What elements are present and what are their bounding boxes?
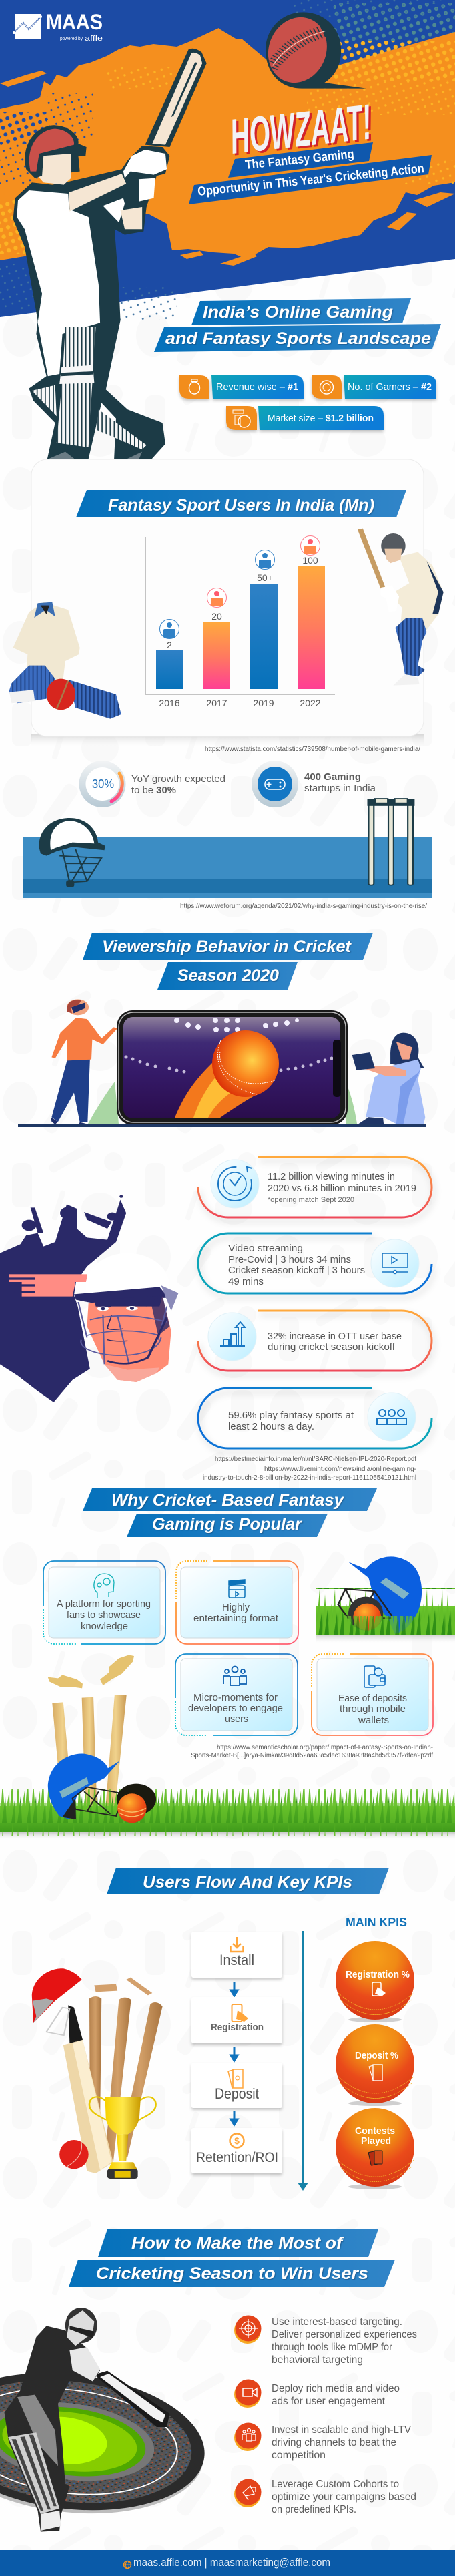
- tip: scalable channels: [234, 2422, 411, 2461]
- ball: [59, 2140, 89, 2169]
- bar chart: 50+: [257, 572, 273, 583]
- bar chart: 100: [302, 555, 318, 566]
- face: [38, 152, 71, 185]
- icon: globe: [124, 2561, 131, 2568]
- section heading: landscape: and Fantasy Sports Landscape: [165, 329, 431, 348]
- arrow: [231, 2111, 238, 2125]
- heading: Fantasy Sport Users In India (Mn): [108, 496, 374, 515]
- card: play fantasy sports: least 2 hours a day.: [228, 1422, 314, 1432]
- fire ball: [175, 1030, 279, 1118]
- stat: YoY growth: [79, 761, 225, 807]
- flow: registration: Registration: [211, 2022, 264, 2033]
- navy splash: [0, 1200, 126, 1402]
- title: Howzaat: [228, 93, 376, 166]
- salmon stripes: [9, 1274, 87, 1297]
- players heads: [22, 1195, 123, 1231]
- card: video streaming: Cricket season kickoff | 3 hours: [228, 1265, 365, 1276]
- face: [87, 1297, 171, 1382]
- illustration: grass with stumps, helmet and ball: [0, 1655, 455, 1840]
- kpi ball: contests: Played: [361, 2135, 391, 2147]
- badge: market size: Market size – $1.2 billion: [268, 413, 374, 424]
- illustration: batsman: [13, 49, 207, 476]
- halftone on blue: [0, 0, 455, 320]
- subtitle ribbons: The Fantasy Gaming: [244, 148, 355, 172]
- card: viewing minutes: 2020 vs 6.8 billion minutes in 2019: [268, 1183, 416, 1194]
- icon: phone wallet: [364, 1666, 385, 1687]
- tip: custom cohorts: Leverage Custom Cohorts to: [272, 2479, 399, 2490]
- flow: retention: Retention/ROI: [196, 2150, 278, 2165]
- illustration: splash portrait: [0, 1195, 179, 1402]
- illustration: stadium and batsman: [0, 2308, 220, 2532]
- source: semantic scholar: Sports-Market-B[...]arya-Nimkar/39d8d52aa63a5dec1638a93f8a4bd5d357f2dfea?p2df: [191, 1752, 433, 1759]
- flow: deposit: [191, 2063, 282, 2108]
- arms: [69, 174, 126, 212]
- illustration: bat, stumps and trophy: [32, 1968, 163, 2179]
- flow: retention: $: [234, 2135, 240, 2146]
- tip: interest-based targeting: [234, 2316, 417, 2366]
- kpi ball: contests: Contests: [355, 2125, 395, 2137]
- badge: revenue: Revenue wise – #1: [216, 381, 298, 393]
- card: OTT user base: [198, 1311, 432, 1371]
- feature card: entertaining: entertaining format: [193, 1613, 278, 1624]
- card: viewing minutes: [198, 1157, 432, 1217]
- bar chart: [145, 535, 335, 708]
- flow: install: [191, 1932, 282, 1978]
- bails and stumps: [48, 1655, 134, 1814]
- section heading: viewership: Viewership Behavior in Cricket: [102, 937, 352, 956]
- bat: [145, 49, 207, 147]
- card: viewing minutes: 11.2 billion viewing minutes in: [268, 1172, 395, 1183]
- kpi ball: contests: [336, 2108, 414, 2189]
- feature card: ease of deposits: through mobile: [340, 1704, 406, 1715]
- tagline: powered by: [60, 37, 83, 41]
- sources: viewership: https://bestmediainfo.in/mailer/nl/nl/BARC-Nielsen-IPL-2020-Report.pdf: [215, 1456, 416, 1463]
- stadium: [0, 2356, 220, 2531]
- kpi ball: deposit: [336, 2024, 414, 2106]
- tip: scalable channels: Invest in scalable and high-LTV: [272, 2424, 411, 2436]
- stat: YoY growth: to be 30%: [131, 785, 176, 796]
- card: viewing minutes: *opening match Sept 2020: [268, 1196, 354, 1204]
- sources: viewership: industry-to-touch-2-8-billion-by-2022-in-india-report-11611055419121.html: [203, 1474, 416, 1482]
- card: video streaming: 49 mins: [228, 1277, 264, 1287]
- tip: custom cohorts: optimize your campaigns based: [272, 2491, 416, 2503]
- helmet: [65, 2308, 97, 2343]
- hero banner: [0, 0, 455, 476]
- illustration: phone scene: [18, 999, 426, 1127]
- logo: affle: [85, 35, 103, 43]
- badge: market size: [226, 406, 384, 430]
- bar chart: 2: [167, 640, 172, 650]
- tip: rich media: ads for user engagement: [272, 2396, 386, 2407]
- card: play fantasy sports: [198, 1388, 432, 1448]
- halftone on orange: [0, 41, 455, 254]
- arrow: [231, 1982, 238, 1996]
- icon: cricket ball: [263, 12, 366, 89]
- panel: fantasy sport users: [9, 459, 444, 748]
- card: video streaming: Pre-Covid | 3 hours 34 mins: [228, 1255, 351, 1265]
- logo: [13, 10, 103, 43]
- plants: [88, 1082, 357, 1124]
- orange brush band: [0, 28, 455, 260]
- feature card: micro-moments: [175, 1654, 298, 1735]
- stumps: [89, 1978, 163, 2163]
- kpi ball: registration: [336, 1941, 414, 2022]
- stat: gaming startups: [252, 761, 376, 807]
- icon: growth chart: [208, 1313, 256, 1361]
- bar chart: 2017: [206, 698, 228, 708]
- icon: helmet: [39, 818, 105, 887]
- blue strip with helmet and wickets: [23, 799, 432, 898]
- bar chart: 2022: [300, 698, 321, 708]
- section heading: landscape: India’s Online Gaming: [203, 303, 393, 322]
- arrow: [231, 2047, 238, 2061]
- tip: interest-based targeting: Use interest-based targeting.: [272, 2316, 402, 2328]
- badge: gamers: [312, 375, 436, 399]
- source: semantic scholar: [191, 1744, 433, 1759]
- icon: wickets: [368, 799, 414, 885]
- heading: main kpis: MAIN KPIS: [346, 1916, 407, 1929]
- flow: retention: [191, 2128, 282, 2173]
- footer: [0, 2550, 455, 2576]
- tip: scalable channels: competition: [272, 2450, 326, 2461]
- section heading: how to win: [69, 2229, 395, 2287]
- stadium lights: [124, 1018, 334, 1074]
- feature card: micro-moments: users: [225, 1714, 248, 1725]
- feature card: platform: [43, 1561, 165, 1644]
- feature card: micro-moments: developers to engage: [188, 1703, 283, 1714]
- illustration: helmet on grass (right): [316, 1556, 455, 1644]
- man in VR: [51, 999, 117, 1124]
- feature card: ease of deposits: wallets: [358, 1715, 389, 1726]
- shirt: [17, 190, 100, 376]
- icon: clapperboard: [229, 1580, 245, 1598]
- helmet and ball: [48, 1754, 156, 1823]
- stat: gaming startups: startups in India: [304, 783, 376, 794]
- section heading: users flow: Users Flow And Key KPIs: [143, 1873, 352, 1892]
- batsman body: [5, 2326, 100, 2532]
- stat: YoY growth: 30%: [92, 777, 114, 791]
- leg pads: [57, 327, 96, 447]
- card: video streaming: [198, 1233, 432, 1293]
- source: statista: https://www.statista.com/statistics/739508/number-of-mobile-gamers-india/: [205, 746, 420, 753]
- phone: [117, 1010, 348, 1125]
- icon: group: [368, 1393, 416, 1441]
- bat: [63, 2005, 113, 2173]
- helmet grille: [78, 1302, 167, 1364]
- tip: rich media: [234, 2380, 400, 2408]
- shoes: [49, 452, 74, 469]
- feature card: platform: A platform for sporting: [57, 1599, 151, 1610]
- tip: scalable channels: driving channels to beat the: [272, 2437, 396, 2448]
- floor line: [18, 1124, 426, 1127]
- heading: [76, 490, 406, 517]
- card: OTT user base: 32% increase in OTT user base: [268, 1331, 402, 1342]
- feature card: entertaining: Highly: [222, 1602, 250, 1613]
- icon: video: [371, 1239, 419, 1287]
- bat: [94, 2371, 169, 2427]
- icon: people: [223, 1667, 246, 1685]
- bar chart: 2019: [253, 698, 274, 708]
- source: semantic scholar: https://www.semanticscholar.org/paper/Impact-of-Fantasy-Sports-on-Indian-: [217, 1744, 433, 1751]
- illustration: right batsman: [358, 529, 444, 686]
- feature card: entertaining: [176, 1561, 298, 1644]
- flow: install: Install: [219, 1952, 254, 1968]
- section heading: users flow: [107, 1868, 389, 1894]
- feature card: ease of deposits: Ease of deposits: [338, 1693, 407, 1704]
- source: weforum: https://www.weforum.org/agenda/2021/02/why-india-s-gaming-industry-is-on-the-rise/: [180, 903, 427, 910]
- feature card: platform: knowledge: [81, 1621, 128, 1632]
- tip: interest-based targeting: Deliver personalized experiences: [272, 2329, 417, 2340]
- section heading: viewership: Season 2020: [177, 966, 279, 985]
- gloves: [123, 150, 167, 178]
- icon: head with gears: [94, 1574, 114, 1598]
- red helmet: [32, 1968, 82, 2035]
- tip: interest-based targeting: behavioral targeting: [272, 2354, 363, 2366]
- card: play fantasy sports: 59.6% play fantasy sports at: [228, 1410, 354, 1421]
- logo wordmark: MAAS: [46, 10, 103, 34]
- person icons: [160, 535, 320, 638]
- section heading: why popular: [83, 1488, 377, 1537]
- subtitle ribbons: [189, 142, 432, 204]
- section heading: how to win: How to Make the Most of: [131, 2234, 344, 2253]
- kpi ball: registration: Registration %: [346, 1969, 410, 1980]
- badge: revenue: [179, 375, 304, 399]
- brush shards: [0, 29, 455, 266]
- sources: viewership: [203, 1456, 416, 1482]
- section heading: why popular: Gaming is Popular: [152, 1515, 302, 1534]
- stat: gaming startups: 400 Gaming: [304, 771, 361, 783]
- long arrow: [298, 1931, 308, 2191]
- section heading: landscape: [154, 298, 441, 352]
- tip: interest-based targeting: through tools like mDMP for: [272, 2342, 393, 2353]
- feature card: micro-moments: Micro-moments for: [193, 1693, 278, 1703]
- illustration: shirt, gloves, ball and pads: [9, 602, 121, 719]
- section heading: viewership: [83, 933, 373, 990]
- helmet: [25, 125, 87, 178]
- white helmet: [85, 1253, 169, 1320]
- tip: custom cohorts: on predefined KPIs.: [272, 2504, 356, 2515]
- feature card: ease of deposits: [312, 1654, 433, 1735]
- tip: custom cohorts: [234, 2479, 416, 2515]
- woman with tablet: [352, 1033, 425, 1124]
- card: video streaming: Video streaming: [228, 1243, 303, 1254]
- flow: registration: [191, 1997, 282, 2043]
- sources: viewership: https://www.livemint.com/news/india/online-gaming-: [264, 1466, 416, 1473]
- icon: clock: [211, 1160, 259, 1208]
- logo mark: [15, 14, 41, 39]
- bar chart: 20: [211, 611, 222, 622]
- trophy: [89, 2097, 156, 2179]
- section heading: how to win: Cricketing Season to Win Users: [96, 2264, 368, 2283]
- hero blue background: [0, 0, 455, 317]
- card: OTT user base: during cricket season kickoff: [268, 1342, 396, 1353]
- badge: gamers: No. of Gamers – #2: [348, 381, 432, 393]
- body outline: [13, 146, 169, 476]
- grass band: [0, 1832, 455, 1840]
- subtitle ribbons: Opportunity in This Year's Cricketing Action: [197, 162, 425, 199]
- flow: deposit: Deposit: [215, 2085, 259, 2102]
- section heading: why popular: Why Cricket- Based Fantasy: [111, 1491, 344, 1510]
- footer: maas.affle.com | maasmarketing@affle.com: [133, 2556, 330, 2569]
- bar chart: 2016: [159, 698, 180, 708]
- tip: rich media: Deploy rich media and video: [272, 2383, 400, 2394]
- feature card: platform: fans to showcase: [67, 1610, 141, 1621]
- stat: YoY growth: YoY growth expected: [131, 773, 225, 785]
- kpi ball: deposit: Deposit %: [355, 2050, 398, 2061]
